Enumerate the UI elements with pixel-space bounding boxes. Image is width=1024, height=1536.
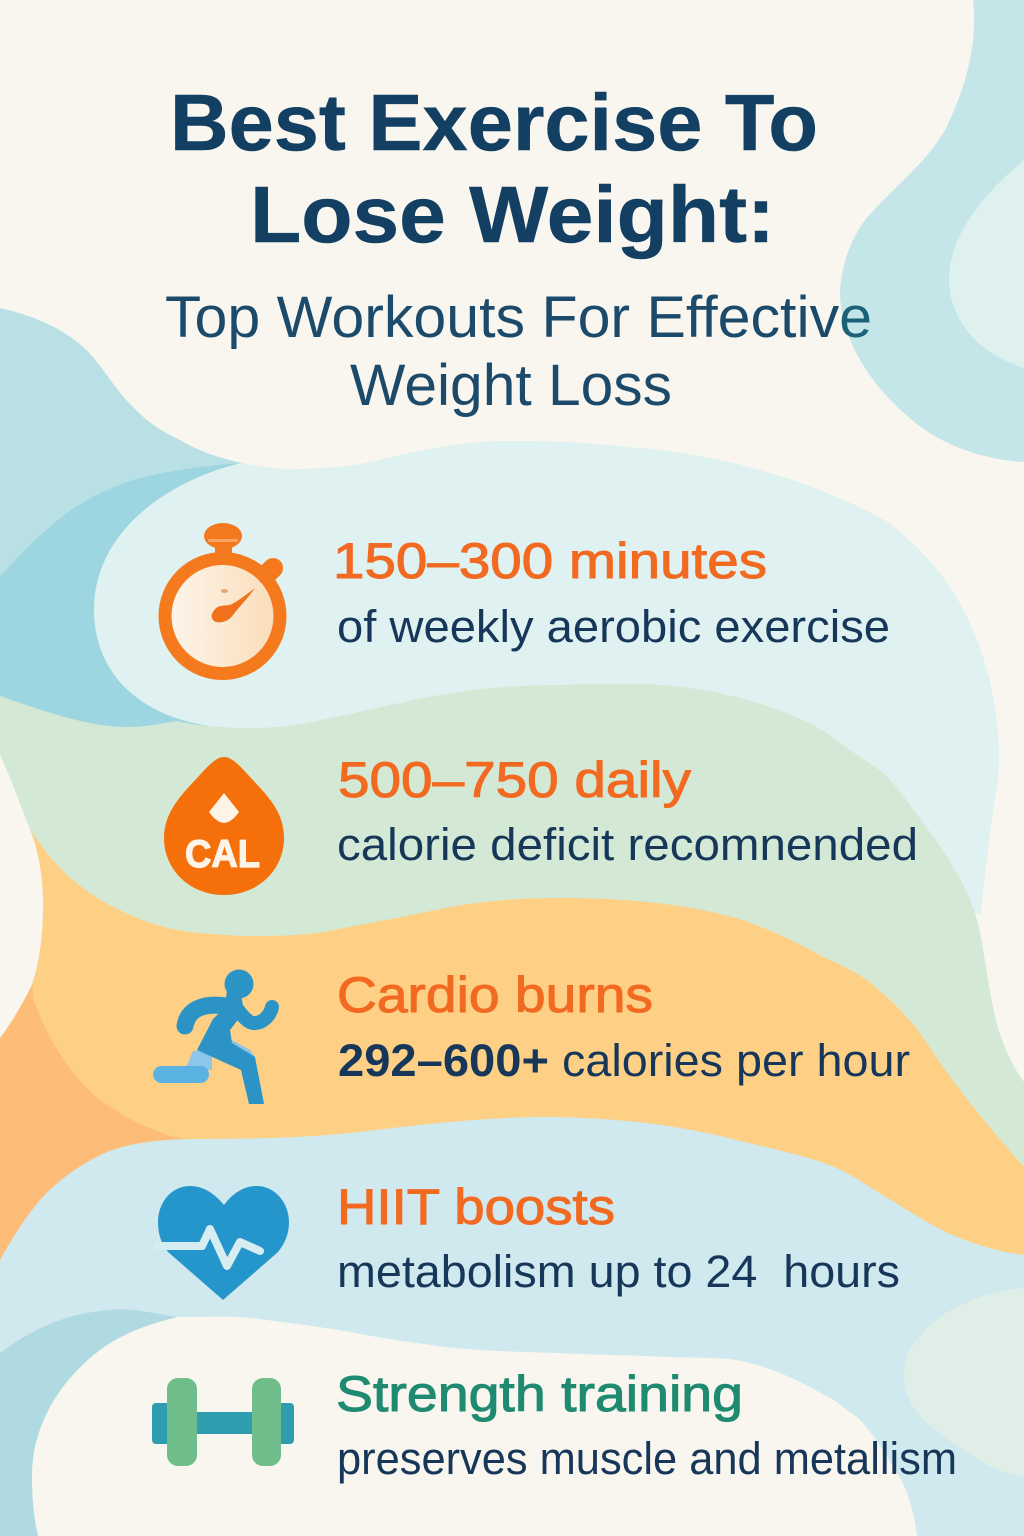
title: Lose Weight:	[250, 170, 775, 259]
panel: calorie deficit	[164, 752, 918, 895]
heading: Strength training: Strength training	[336, 1366, 743, 1422]
description: of weekly aerobic exercise	[337, 601, 890, 652]
description: metabolism up to 24 hours	[337, 1246, 900, 1297]
heading: 500–750 daily: 500–750 daily	[338, 752, 691, 808]
heading: 150–300 minutes: 150–300 minutes	[333, 533, 767, 589]
subtitle: Top Workouts For Effective	[165, 285, 872, 350]
description: calorie deficit recomnended	[337, 819, 918, 870]
description: preserves muscle and metallism	[337, 1433, 957, 1484]
panel: HIIT	[158, 1179, 900, 1300]
heading: Cardio burns: Cardio burns	[337, 967, 653, 1023]
subtitle	[165, 285, 872, 418]
description: calories per hour	[562, 1035, 910, 1086]
icon: calorie drop	[164, 757, 284, 895]
description: 292–600+	[338, 1035, 549, 1086]
icon: heart with pulse	[158, 1186, 289, 1300]
subtitle: Weight Loss	[350, 353, 672, 418]
title: Best Exercise To	[170, 78, 818, 167]
panel: strength training	[152, 1366, 957, 1484]
icon: stopwatch	[165, 523, 280, 674]
icon: calorie drop: CAL	[185, 833, 260, 876]
panel: aerobic exercise	[165, 523, 890, 674]
heading: HIIT boosts: HIIT boosts	[337, 1179, 615, 1235]
title	[170, 78, 818, 259]
panel: cardio	[153, 967, 910, 1104]
icon: dumbbell	[152, 1378, 294, 1466]
icon: runner	[153, 970, 272, 1104]
